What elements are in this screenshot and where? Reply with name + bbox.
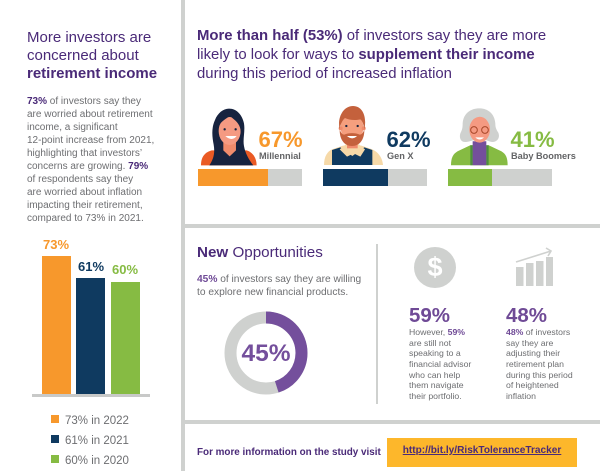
chart baseline (32, 394, 150, 397)
footer text: For more information on the study visit (197, 447, 381, 458)
millennial label: Millennial (259, 151, 301, 161)
stat column: 59% (409, 247, 472, 401)
new opportunities heading: New Opportunities (197, 244, 323, 261)
stat 59% text: speaking to a (409, 348, 461, 358)
bar 2021 (76, 278, 105, 394)
stat 59% text (409, 327, 472, 401)
new opportunities text (197, 274, 361, 298)
icon: dollar coin (414, 247, 456, 288)
horizontal divider lower (185, 420, 600, 424)
stat 59% text: are still not (409, 338, 451, 348)
left body text (27, 96, 154, 224)
link text: http://bit.ly/RiskToleranceTracker (403, 445, 561, 456)
vertical divider opportunities (376, 244, 378, 404)
stat 48% text: 48% of investors (506, 327, 570, 337)
stat 59% text: However, 59% (409, 327, 465, 337)
bar 2020 (111, 282, 140, 394)
vertical divider (181, 0, 185, 471)
icon: baby boomer woman (451, 108, 508, 166)
baby boomers group (448, 108, 576, 186)
gen x progress bar (323, 169, 427, 186)
stat column: 48% (506, 248, 573, 401)
baby boomers progress bar (448, 169, 552, 186)
main heading (197, 28, 546, 82)
left heading: retirement income (27, 65, 157, 82)
left body text: are worried about inflation (27, 187, 142, 198)
millennial percent: 67% (258, 127, 303, 152)
main heading: More than half (53%) of investors say they are more (197, 28, 546, 44)
left body text: highlighting that investors’ (27, 148, 142, 159)
baby boomers percent: 41% (510, 127, 555, 152)
stat 48% text: adjusting their (506, 348, 560, 358)
left body text: are worried about retirement (27, 109, 153, 120)
donut chart 45% (224, 312, 308, 394)
gen x label: Gen X (387, 151, 414, 161)
legend (51, 415, 129, 467)
legend text 2022: 73% in 2022 (65, 415, 129, 427)
bar chart (32, 237, 150, 397)
donut label: 45% (241, 340, 291, 367)
left body text: 12-point increase from 2021, (27, 135, 154, 146)
stat 59% text: them navigate (409, 380, 464, 390)
legend text 2020: 60% in 2020 (65, 455, 129, 467)
stat 59% text: their portfolio. (409, 391, 462, 401)
legend swatch 2021 (51, 435, 59, 443)
new opportunities text: 45% of investors say they are willing (197, 274, 361, 285)
footer link button (387, 438, 577, 467)
main heading: during this period of increased inflation (197, 66, 452, 82)
legend swatch 2022 (51, 415, 59, 423)
stat 48% text (506, 327, 573, 401)
left body text: of respondents say they (27, 174, 133, 185)
bar label 60%: 60% (112, 262, 138, 277)
bar 2022 (42, 256, 71, 394)
left body text: concerns are growing. 79% (27, 161, 148, 172)
stat 48% text: inflation (506, 391, 536, 401)
left body text: impacting their retirement, (27, 200, 143, 211)
stat 59%: 59% (409, 304, 450, 327)
bar label 61%: 61% (78, 259, 104, 274)
millennial group (198, 108, 303, 186)
stat 59% text: financial advisor (409, 359, 471, 369)
left body text: 73% of investors say they (27, 96, 141, 107)
gen x group (323, 106, 431, 186)
stat 48%: 48% (506, 304, 547, 327)
icon: dollar coin: $ (427, 252, 443, 282)
horizontal divider upper (185, 224, 600, 228)
millennial progress bar (198, 169, 302, 186)
gen x percent: 62% (386, 127, 431, 152)
stat 59% text: who can help (409, 370, 460, 380)
stat 48% text: during this period (506, 370, 573, 380)
left body text: income, a significant (27, 122, 118, 133)
icon: rising bar chart (516, 248, 553, 286)
bar label 73%: 73% (43, 237, 69, 252)
left heading: concerned about (27, 47, 139, 64)
stat 48% text: of heightened (506, 380, 559, 390)
left heading: More investors are (27, 29, 151, 46)
legend swatch 2020 (51, 455, 59, 463)
icon: millennial woman (201, 108, 257, 166)
legend text 2021: 61% in 2021 (65, 435, 129, 447)
main heading: likely to look for ways to supplement their income (197, 47, 535, 63)
baby boomers label: Baby Boomers (511, 151, 576, 161)
new opportunities text: to explore new financial products. (197, 287, 348, 298)
left body text: compared to 73% in 2021. (27, 213, 144, 224)
icon: gen x man (324, 106, 383, 165)
stat 48% text: say they are (506, 338, 553, 348)
left heading (27, 29, 157, 82)
stat 48% text: retirement plan (506, 359, 564, 369)
